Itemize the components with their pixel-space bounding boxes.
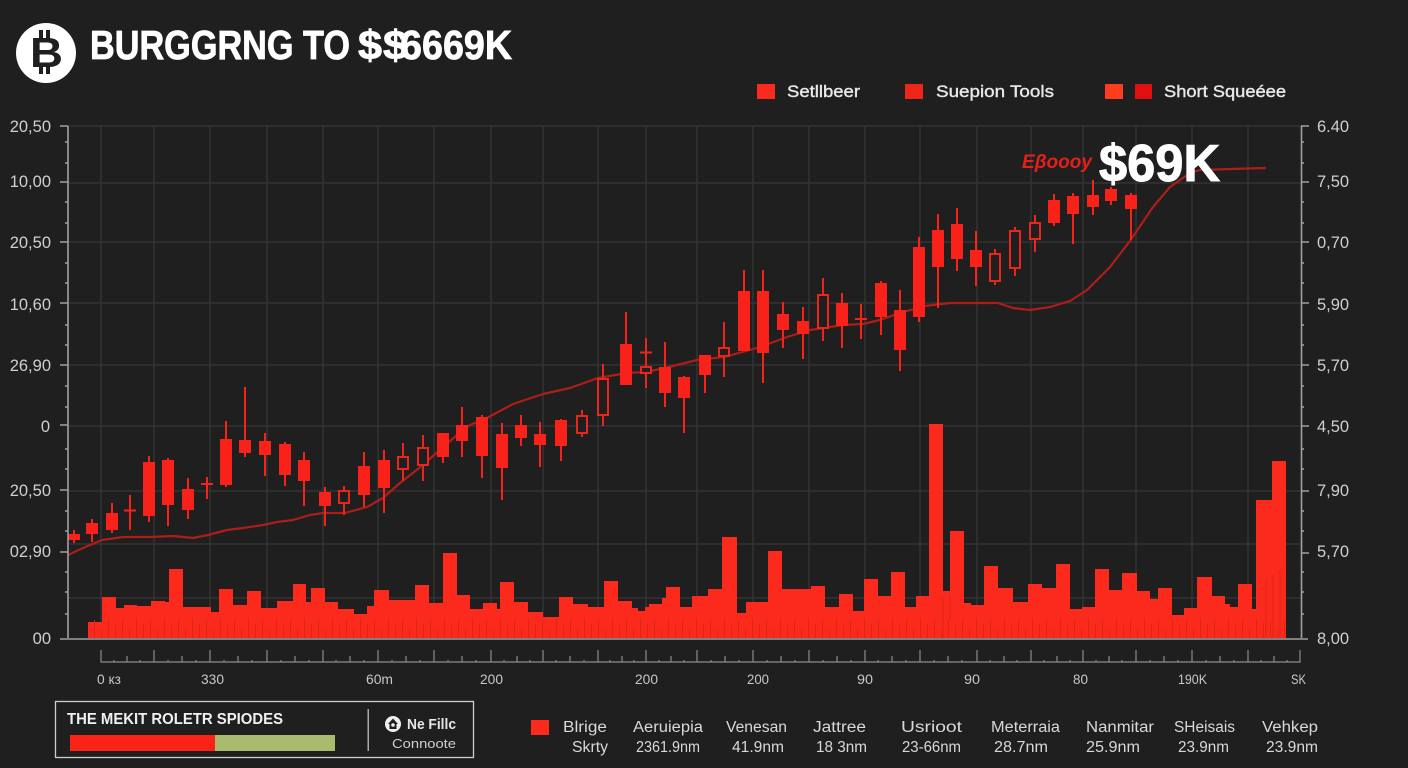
- panel side label: Connoote: [392, 737, 456, 751]
- legend: bottom entries: 41.9nm: [732, 739, 784, 756]
- left axis labels: 02,90: [10, 543, 51, 561]
- x-axis labels: [97, 672, 1306, 687]
- title: BURGGRNG TO: [90, 22, 350, 68]
- right axis labels: 5,70: [1317, 357, 1349, 375]
- left axis labels: 20,50: [10, 234, 51, 252]
- x-axis labels: 200: [747, 672, 769, 687]
- panel side label: Ne Fillc: [407, 716, 456, 733]
- x-axis labels: 90: [964, 672, 980, 687]
- legend: bottom entries: Aeruiepia: [633, 719, 703, 736]
- legend: bottom entries: 23-66nm: [902, 739, 961, 756]
- progress bar: [70, 735, 335, 751]
- left axis labels: 20,50: [10, 118, 51, 136]
- right axis labels: [1317, 118, 1349, 648]
- panel: market progress box: [56, 702, 474, 758]
- x-axis labels: 80: [1073, 672, 1088, 687]
- legend: bottom entries: 23.9nm: [1178, 739, 1229, 756]
- x-axis labels: 90: [857, 672, 873, 687]
- icon: house badge: [385, 716, 401, 732]
- left axis labels: 10,60: [10, 296, 51, 314]
- legend: bottom entries: 18 3nm: [816, 739, 867, 756]
- legend: bottom entries: 2361.9nm: [636, 739, 700, 756]
- callout: $69K price: $69K: [1099, 135, 1220, 193]
- legend: bottom entries: Blrige: [563, 719, 607, 736]
- right axis labels: 6.40: [1317, 118, 1349, 136]
- left axis labels: 00: [33, 630, 51, 648]
- title: $: [358, 22, 382, 68]
- callout: Eboooy label: Eβoooy: [1022, 152, 1093, 173]
- legend: bottom entries: Venesan: [726, 719, 787, 736]
- volume bars: [88, 424, 1286, 638]
- legend: bottom entries: Meterraia: [991, 719, 1060, 736]
- icon: bitcoin logo: B: [30, 29, 63, 76]
- left axis labels: 10,00: [10, 173, 51, 191]
- right axis labels: 8,00: [1317, 630, 1349, 648]
- title: 6: [400, 22, 422, 68]
- legend: bottom entries: Vehkep: [1262, 719, 1318, 736]
- right axis labels: 4,50: [1317, 418, 1349, 436]
- x-axis labels: 200: [480, 672, 503, 687]
- right axis labels: 5,90: [1317, 296, 1349, 314]
- x-axis labels: 200: [635, 672, 658, 687]
- legend: bottom entries: Nanmitar: [1086, 719, 1154, 736]
- legend: bottom entries: Skrty: [572, 739, 608, 756]
- left axis labels: 0: [41, 418, 50, 436]
- right axis labels: 5,70: [1317, 543, 1349, 561]
- title: 669K: [422, 22, 512, 68]
- legend: bottom entries: Jattree: [813, 719, 866, 736]
- moving average line: [68, 168, 1266, 555]
- icon: bitcoin logo: [16, 23, 76, 83]
- candlesticks: hollow: [339, 215, 1040, 515]
- legend: bottom swatch: [531, 720, 549, 735]
- legend: top: [757, 82, 1286, 101]
- candlesticks: solid: [69, 180, 1136, 543]
- legend: bottom entries: SHeisais: [1174, 719, 1235, 736]
- x-axis labels: 0 кз: [97, 672, 121, 687]
- legend: bottom entries: [563, 719, 1318, 756]
- title: $: [383, 22, 408, 68]
- left axis labels: [10, 118, 51, 648]
- legend: bottom entries: 23.9nm: [1266, 739, 1318, 756]
- x-axis labels: 60m: [366, 672, 393, 687]
- legend: top: Suepion Tools: [936, 82, 1054, 101]
- legend: bottom entries: 28.7nm: [994, 739, 1048, 756]
- right axis labels: 0,70: [1317, 234, 1349, 252]
- right axis labels: 7,50: [1317, 173, 1349, 191]
- left axis labels: 26,90: [10, 357, 51, 375]
- right axis labels: 7,90: [1317, 482, 1349, 500]
- legend: top: Short Squeéee: [1164, 82, 1286, 101]
- legend: bottom entries: 25.9nm: [1086, 739, 1140, 756]
- x-axis ruler: [101, 650, 1300, 662]
- legend: bottom entries: Usrioot: [901, 719, 963, 736]
- panel side label: [392, 716, 456, 751]
- x-axis labels: SK: [1291, 672, 1306, 687]
- x-axis labels: 190K: [1178, 672, 1207, 687]
- panel heading: THE MEKIT ROLETR SPIODES: [67, 711, 283, 728]
- legend: top: Setllbeer: [787, 82, 860, 101]
- axes: [60, 126, 1309, 639]
- chart: price and volume: [60, 126, 1309, 639]
- left axis labels: 20,50: [10, 482, 51, 500]
- x-axis labels: 330: [201, 672, 224, 687]
